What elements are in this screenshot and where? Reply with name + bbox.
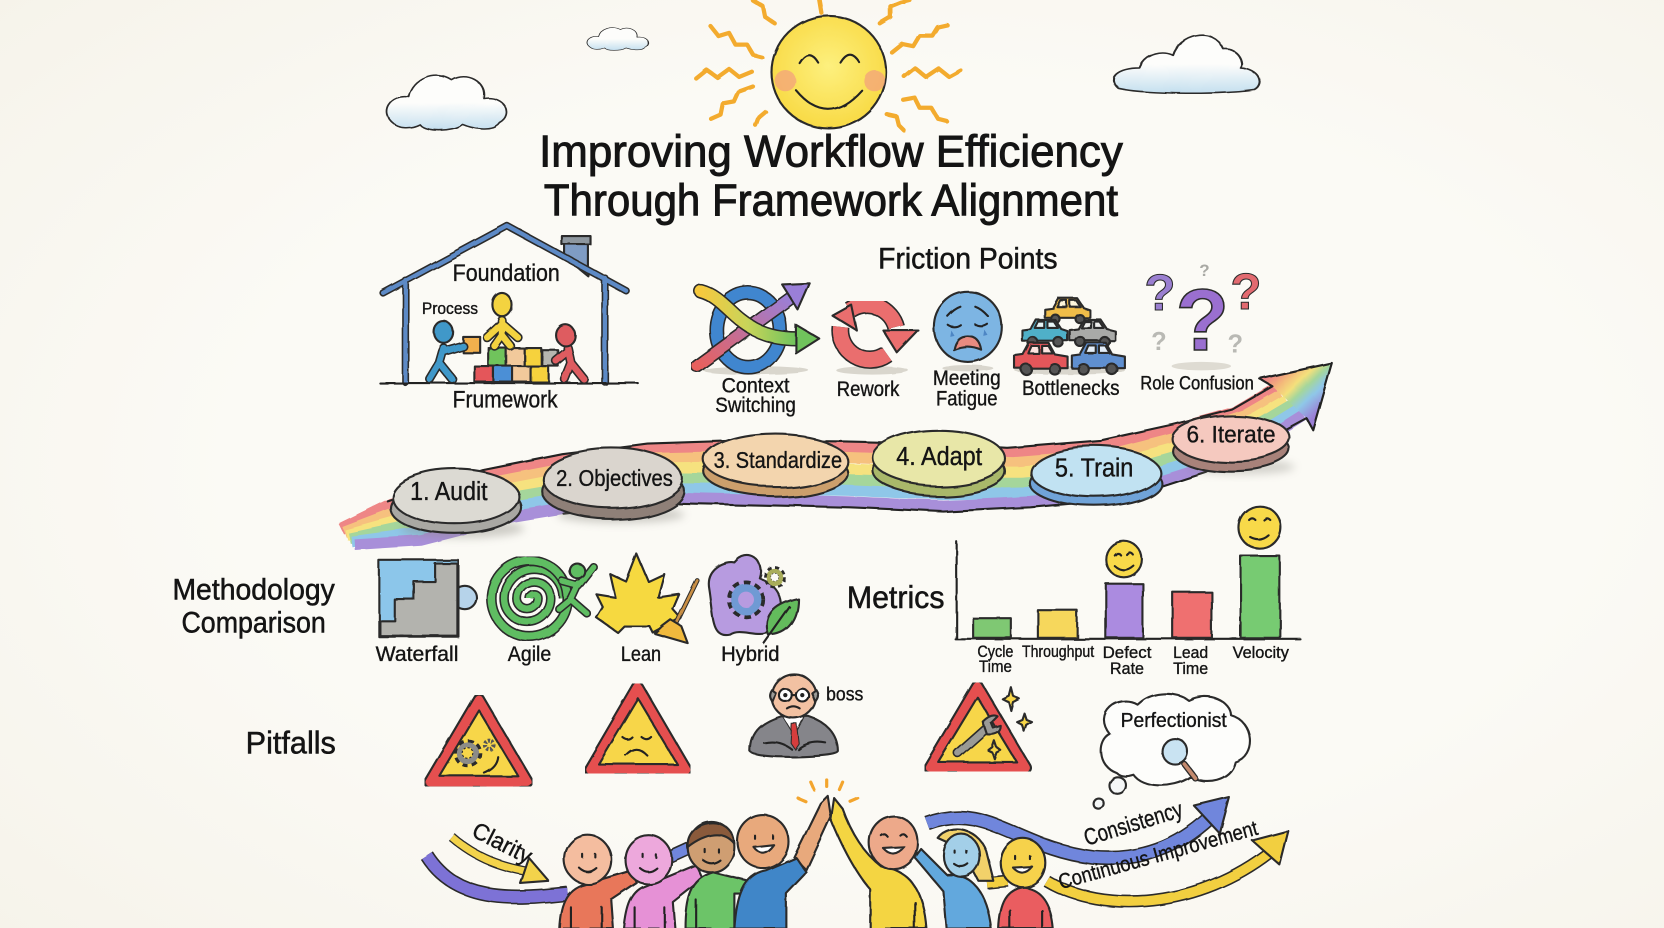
stone 1 audit bbox=[389, 469, 524, 538]
heading: methodology comparison bbox=[172, 574, 335, 639]
icon: rework bbox=[832, 305, 918, 375]
cloud small bbox=[587, 28, 649, 50]
stone 2 objectives: 2. Objectives bbox=[556, 465, 673, 491]
heading: pitfalls: Pitfalls bbox=[246, 724, 336, 760]
label: bottlenecks: Bottlenecks bbox=[1022, 377, 1120, 400]
icon: magnifier bbox=[1184, 764, 1195, 778]
figure yellow bbox=[487, 320, 518, 346]
icon: warning gears bbox=[430, 699, 527, 782]
smiley velocity bbox=[1238, 506, 1281, 549]
icon: role confusion question marks: ? bbox=[1227, 330, 1243, 358]
arrow head bbox=[1260, 363, 1332, 430]
chart labels bbox=[977, 642, 1289, 678]
person 4 blue with raised arm bbox=[734, 796, 831, 928]
cloud left bbox=[387, 76, 507, 130]
panel: bottom team with arrows bbox=[427, 780, 1288, 928]
chart labels: Cycle bbox=[977, 642, 1013, 661]
stone 3 standardize bbox=[705, 434, 847, 497]
panel: foundation house: Process bbox=[422, 299, 478, 318]
panel: friction points icons bbox=[697, 261, 1261, 417]
stone 5 train bbox=[1029, 447, 1161, 506]
rainbow path with arrow bbox=[341, 363, 1332, 544]
chart labels: Time bbox=[979, 657, 1012, 676]
icon: hybrid bbox=[708, 555, 798, 643]
panel: methodology icons bbox=[376, 554, 798, 666]
icon: boss bbox=[750, 674, 838, 757]
car blue bbox=[1072, 343, 1125, 375]
title line 2: Through Framework Alignment bbox=[544, 176, 1119, 225]
callout: perfectionist thought cloud: Perfectionist bbox=[1121, 710, 1227, 732]
label: meeting fatigue: Fatigue bbox=[936, 387, 998, 410]
arrow labels: Continuous Improvement bbox=[1056, 817, 1261, 894]
house roof and walls bbox=[383, 226, 626, 382]
chimney bbox=[565, 242, 588, 276]
stone 4 adapt: 4. Adapt bbox=[896, 443, 982, 471]
icon: role confusion question marks bbox=[1144, 261, 1261, 370]
arrow labels: Consistency bbox=[1081, 796, 1186, 851]
rainbow outline bbox=[387, 363, 1332, 514]
panel: six stepping stones bbox=[389, 415, 1295, 538]
label: context switching: Context bbox=[722, 375, 790, 398]
person 1 orange bbox=[559, 835, 637, 928]
arrow: purple swoosh bbox=[427, 855, 568, 897]
label: meeting fatigue: Meeting bbox=[933, 367, 1001, 390]
label: context switching: Switching bbox=[715, 394, 796, 417]
bar lead time bbox=[1173, 592, 1212, 638]
panel: foundation house: Frumework bbox=[453, 387, 558, 414]
heading: methodology comparison: Comparison bbox=[181, 606, 326, 639]
heading: metrics: Metrics bbox=[847, 579, 944, 615]
cloud right bbox=[1113, 35, 1260, 93]
chart labels: Defect bbox=[1103, 643, 1152, 662]
bar velocity bbox=[1241, 556, 1280, 638]
stone 5 train: 5. Train bbox=[1055, 454, 1133, 482]
person 6 blue with blond hair bbox=[915, 829, 993, 928]
person 5 yellow with raised arm bbox=[831, 798, 926, 928]
arrow: continuous improvement yellow bbox=[987, 851, 1271, 902]
stone 6 iterate bbox=[1172, 415, 1295, 474]
label: lean: Lean bbox=[621, 643, 661, 666]
stone 4 adapt bbox=[873, 431, 1005, 496]
car red bbox=[1015, 343, 1068, 375]
sun face bbox=[772, 16, 886, 128]
label: agile: Agile bbox=[508, 643, 551, 666]
bar defect rate bbox=[1106, 584, 1143, 638]
icon: waterfall bbox=[379, 560, 476, 637]
label: hybrid: Hybrid bbox=[721, 643, 779, 666]
panel: foundation house bbox=[380, 226, 638, 414]
car gray bbox=[1070, 319, 1115, 346]
car teal bbox=[1022, 319, 1068, 346]
label: context switching bbox=[715, 375, 796, 417]
label: role confusion: Role Confusion bbox=[1140, 373, 1254, 394]
label: boss: boss bbox=[826, 684, 863, 705]
person 2 pink bbox=[624, 835, 703, 928]
bar chart: metrics bbox=[955, 506, 1300, 678]
chart labels: Throughput bbox=[1022, 642, 1094, 661]
arrow labels bbox=[468, 796, 1261, 894]
label: waterfall: Waterfall bbox=[376, 643, 458, 666]
bar cycle time bbox=[973, 619, 1011, 638]
icon: warning sad face bbox=[590, 688, 686, 769]
label: meeting fatigue bbox=[933, 367, 1001, 410]
icon: role confusion question marks: ? bbox=[1151, 328, 1167, 356]
icon: role confusion question marks: ? bbox=[1230, 263, 1261, 320]
sun bbox=[696, 0, 960, 129]
icon: context switching bbox=[697, 283, 819, 375]
stone 2 objectives bbox=[541, 449, 684, 523]
chart labels: Velocity bbox=[1233, 643, 1289, 662]
sun rays bbox=[696, 0, 960, 129]
arrow: clarity yellow bbox=[451, 836, 528, 871]
stone 1 audit: 1. Audit bbox=[410, 478, 488, 506]
panel: pitfalls icons bbox=[430, 674, 1250, 809]
title bbox=[539, 128, 1123, 225]
stone 6 iterate: 6. Iterate bbox=[1186, 422, 1276, 449]
callout: perfectionist thought cloud bbox=[1093, 694, 1250, 809]
person 3 green bbox=[686, 821, 747, 928]
icon: role confusion question marks: ? bbox=[1144, 264, 1175, 321]
icon: agile spiral bbox=[491, 560, 593, 637]
stacked blocks bbox=[463, 336, 558, 382]
icon: meeting fatigue bbox=[934, 292, 1002, 371]
icon: role confusion question marks: ? bbox=[1176, 272, 1229, 369]
car yellow bbox=[1044, 298, 1090, 323]
house labels: Foundation bbox=[453, 260, 560, 287]
high five sparks bbox=[798, 780, 857, 801]
chart labels: Lead bbox=[1173, 643, 1208, 662]
person 7 red bbox=[999, 838, 1053, 928]
heading: methodology comparison: Methodology bbox=[172, 574, 335, 607]
chart labels: Time bbox=[1173, 659, 1208, 678]
smiley defect rate bbox=[1106, 541, 1142, 577]
icon: bottlenecks cars bbox=[1015, 298, 1125, 375]
chart labels: Rate bbox=[1110, 659, 1144, 678]
heading: friction points: Friction Points bbox=[878, 242, 1058, 275]
arrow labels: Clarity bbox=[468, 817, 537, 869]
title line 1: Improving Workflow Efficiency bbox=[539, 128, 1123, 177]
stone 3 standardize: 3. Standardize bbox=[714, 447, 842, 473]
thought bubbles bbox=[1109, 777, 1126, 794]
figure blue bbox=[430, 346, 463, 379]
sun cheeks bbox=[775, 70, 885, 91]
arrow: consistency blue bbox=[928, 817, 1210, 858]
label: rework: Rework bbox=[837, 378, 900, 401]
icon: warning wrench bbox=[930, 687, 1032, 767]
sun smile bbox=[796, 55, 862, 109]
icon: lean leaf and broom bbox=[596, 554, 697, 643]
band behind people bbox=[669, 847, 692, 857]
icon: role confusion question marks: ? bbox=[1199, 261, 1210, 280]
figure red bbox=[556, 348, 584, 379]
bar throughput bbox=[1038, 610, 1077, 638]
chart axes bbox=[955, 541, 1300, 639]
